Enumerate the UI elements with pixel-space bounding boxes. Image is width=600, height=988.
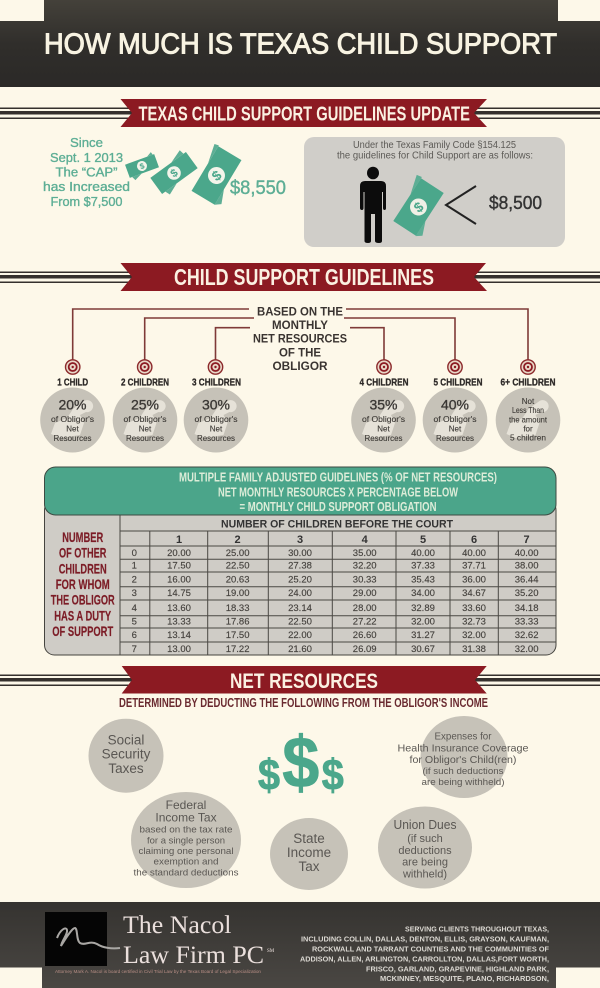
table rows: 21.60 (288, 644, 312, 655)
table rows: 23.14 (288, 603, 312, 614)
table rows: 13.14 (167, 630, 191, 641)
circle: 6+ children: for (523, 425, 533, 434)
row axis label: FOR WHOM (56, 576, 110, 592)
text: based on the monthly net resources (253, 304, 347, 373)
table rows: 4 (132, 603, 137, 614)
service area text: ROCKWALL AND TARRANT COUNTIES AND THE COMMUNITIES OF (312, 944, 549, 954)
table rows: 32.73 (462, 616, 486, 627)
icon: money bill (388, 174, 449, 239)
row axis label: CHILDREN (59, 560, 107, 576)
table rows: 0 (132, 548, 137, 559)
table rows: 2 (132, 575, 137, 586)
table rows: 33.33 (515, 616, 538, 627)
child count labels: 4 CHILDREN (360, 378, 408, 388)
circle: 6+ children (496, 388, 560, 452)
amount: $8,500: $8,500 (489, 192, 542, 213)
circle: 3 children 30% (184, 388, 248, 452)
icon: less-than sign (446, 186, 476, 224)
table green header: = MONTHLY CHILD SUPPORT OBLIGATION (240, 499, 436, 514)
table rows: 34.00 (411, 588, 435, 599)
circle: 1 child 20%: Resources (54, 434, 92, 443)
ribbon heading: net resources: NET RESOURCES (230, 670, 378, 693)
column headers: 5 (420, 534, 426, 546)
table rows: 6 (132, 630, 137, 641)
table: multiple family adjusted guidelines (44, 467, 556, 655)
table rows: 19.00 (226, 588, 249, 599)
ribbon heading: guidelines update (0, 99, 600, 127)
text: based on the monthly net resources: NET RESOURCES (253, 332, 347, 346)
icon: dollar signs: $ (258, 751, 280, 800)
header band (0, 0, 600, 87)
text: family code: the guidelines for Child Support are as follows: (337, 150, 533, 162)
column headers: 2 (235, 534, 241, 546)
circle: union dues: (if such (407, 833, 443, 845)
connector lines (73, 309, 528, 360)
firm name (123, 912, 275, 969)
table grid (120, 515, 556, 655)
text: family code (337, 140, 533, 162)
circle: 1 child 20%: 20% (58, 396, 87, 412)
table rows: 20.00 (167, 548, 191, 559)
text: based on the monthly net resources: MONTHLY (272, 318, 328, 332)
circle: 3 children 30%: Resources (197, 434, 235, 443)
panel: family code comparison (304, 137, 565, 247)
amount: $8,550: $8,550 (230, 178, 286, 199)
text: cap increase: The “CAP” (56, 164, 118, 180)
icon: large money bill: $ (208, 167, 225, 184)
child count labels: 2 CHILDREN (121, 378, 169, 388)
text: cap increase (43, 135, 130, 209)
table rows: 32.00 (462, 630, 486, 641)
icon: medium money bill (147, 148, 201, 198)
table rows: 22.50 (226, 561, 249, 572)
table rows: 40.00 (462, 548, 486, 559)
circle: state income tax: Tax (298, 859, 320, 874)
table rows: 36.00 (462, 575, 486, 586)
column axis label: NUMBER OF CHILDREN BEFORE THE COURT (221, 519, 453, 531)
circle: union dues: are being (402, 857, 448, 869)
service area text: SERVING CLIENTS THROUGHOUT TEXAS, (405, 924, 549, 934)
circle: union dues (378, 806, 472, 888)
circle: 5 children 40% (423, 388, 487, 452)
column headers: 4 (362, 534, 369, 546)
row axis label: THE OBLIGOR (51, 592, 115, 608)
table rows: 26.09 (353, 644, 377, 655)
ribbon heading: child support guidelines: CHILD SUPPORT GUIDELINES (174, 264, 434, 290)
table rows: 32.89 (411, 603, 435, 614)
footer band (0, 902, 600, 988)
table rows: 29.00 (353, 588, 377, 599)
circle: federal income tax: claiming one personal (138, 846, 234, 857)
child count labels: 1 CHILD (57, 378, 88, 388)
circle: 4 children 35%: Net (377, 424, 390, 434)
table rows: 18.33 (226, 603, 249, 614)
child count labels: 5 CHILDREN (434, 378, 482, 388)
table rows: 35.00 (353, 548, 377, 559)
table rows: 32.00 (411, 616, 435, 627)
text: cap increase: Sept. 1 2013 (50, 150, 123, 165)
ribbon heading: net resources (0, 666, 600, 694)
service area text (300, 924, 549, 983)
table rows: 31.27 (411, 630, 435, 641)
circle: state income tax (270, 818, 348, 890)
child count labels: 3 CHILDREN (192, 378, 241, 388)
table rows: 37.33 (411, 561, 435, 572)
table rows: 25.20 (288, 575, 312, 586)
firm name: Law Firm PC (123, 942, 264, 969)
circle: federal income tax: the standard deductions (134, 867, 239, 878)
circle: union dues: Union Dues (394, 818, 456, 832)
circle: union dues: withheld) (402, 868, 447, 880)
circle: 6+ children: Not (522, 397, 535, 406)
table rows: 35.20 (515, 588, 538, 599)
circle: federal income tax (131, 792, 241, 888)
table rows: 30.33 (353, 575, 377, 586)
table rows: 37.71 (462, 561, 486, 572)
circle: federal income tax: Federal (166, 798, 206, 812)
circle: social security taxes: Security (102, 746, 151, 762)
table rows: 27.22 (353, 616, 377, 627)
circle: 4 children 35%: Resources (364, 434, 402, 443)
table green header: MULTIPLE FAMILY ADJUSTED GUIDELINES (% OF NET RESOURCES) (179, 470, 497, 485)
table rows: 14.75 (167, 588, 191, 599)
table rows: 13.60 (167, 603, 191, 614)
column headers: 7 (524, 534, 530, 546)
table rows: 34.18 (515, 603, 538, 614)
table rows: 1 (132, 561, 137, 572)
icon: person (360, 167, 386, 243)
circle: social security taxes: Taxes (108, 761, 144, 776)
service area text: MCKINNEY, MESQUITE, PLANO, RICHARDSON, (380, 974, 549, 983)
icon: targets (66, 360, 535, 374)
table rows: 7 (132, 644, 137, 655)
circle: 5 children 40%: 40% (441, 396, 469, 412)
table rows: 35.43 (411, 575, 435, 586)
row axis label: NUMBER (62, 529, 103, 545)
circle: state income tax: State (293, 831, 325, 846)
table rows: 32.62 (515, 630, 538, 641)
table rows: 27.38 (288, 561, 312, 572)
circle: federal income tax: based on the tax rate (140, 825, 232, 836)
circle: 2 children 25%: 25% (131, 396, 159, 412)
text: based on the monthly net resources: OF THE (279, 346, 321, 360)
table rows: 20.63 (226, 575, 249, 586)
circle: federal income tax: for a single person (147, 836, 225, 846)
table rows: 17.86 (226, 616, 249, 627)
circle: state income tax: Income (287, 845, 331, 860)
icon: small money bill: $ (138, 161, 146, 171)
table green header: NET MONTHLY RESOURCES X PERCENTAGE BELOW (218, 485, 459, 500)
text: cap increase: Since (70, 135, 103, 150)
table rows: 30.67 (411, 644, 435, 655)
row axis label (51, 529, 115, 639)
circle: 1 child 20% (40, 388, 105, 452)
circle: 4 children 35%: 35% (369, 396, 398, 412)
circle: federal income tax: Income Tax (155, 811, 217, 825)
circle: social security taxes (88, 719, 164, 793)
icon: large money bill (188, 143, 247, 208)
table rows: 22.00 (288, 630, 312, 641)
circle: 1 child 20%: Net (66, 424, 80, 434)
circle: 3 children 30%: of Obligor's (194, 415, 238, 424)
table rows: 40.00 (515, 548, 538, 559)
circle: 5 children 40%: of Obligor's (434, 415, 476, 424)
circle: 5 children 40%: Net (449, 424, 462, 434)
icon: dollar signs: $ (322, 751, 344, 800)
table rows: 25.00 (226, 548, 249, 559)
table rows: 32.00 (515, 644, 538, 655)
icon: small money bill (124, 151, 160, 182)
icon: dollar signs: $ (282, 723, 319, 803)
icon: dollar signs (258, 723, 344, 803)
firm name: SM (267, 949, 275, 954)
column headers: 6 (471, 534, 477, 546)
table green header (44, 467, 556, 515)
column headers: 1 (176, 534, 182, 546)
table rows: 40.00 (411, 548, 435, 559)
circle: health insurance expenses: for Obligor's Child(ren) (410, 754, 516, 766)
table rows: 24.00 (288, 588, 312, 599)
icon: money bill: $ (411, 198, 427, 216)
table rows: 36.44 (515, 575, 538, 586)
column headers (176, 534, 530, 546)
table rows: 28.00 (353, 603, 377, 614)
circle: 2 children 25%: Resources (126, 434, 164, 443)
service area text: FRISCO, GARLAND, GRAPEVINE, HIGHLAND PARK, (366, 964, 549, 974)
circle: health insurance expenses: Expenses for (434, 730, 492, 742)
title: HOW MUCH IS TEXAS CHILD SUPPORT (44, 28, 557, 60)
service area text: INCLUDING COLLIN, DALLAS, DENTON, ELLIS, GRAYSON, KAUFMAN, (301, 934, 549, 944)
table rows: 34.67 (462, 588, 486, 599)
circle: 1 child 20%: of Obligor's (51, 415, 94, 424)
table rows: 32.20 (353, 561, 377, 572)
text: cap increase: has Increased (43, 179, 130, 194)
table rows: 22.50 (288, 616, 312, 627)
circle: health insurance expenses: (if such deductions (422, 766, 504, 777)
table rows: 30.00 (288, 548, 312, 559)
subheading: DETERMINED BY DEDUCTING THE FOLLOWING FROM THE OBLIGOR'S INCOME (119, 696, 488, 710)
child count labels (57, 378, 555, 388)
attorney note: Attorney Mark A. Nacol is board certified in Civil Trial Law by the Texas Board of Legal Specialization (55, 969, 262, 974)
circle: 6+ children: Less Than (512, 406, 544, 415)
circle: union dues: deductions (398, 845, 452, 857)
service area text: ADDISON, ALLEN, ARLINGTON, CARROLLTON, DALLAS,FORT WORTH, (300, 954, 549, 964)
table rows: 17.50 (167, 561, 191, 572)
row axis label: OF SUPPORT (52, 623, 113, 639)
icon: medium money bill: $ (168, 167, 180, 180)
table rows: 5 (132, 616, 137, 627)
circle: 2 children 25% (113, 388, 177, 452)
child count labels: 6+ CHILDREN (500, 378, 556, 388)
circle: 5 children 40%: Resources (436, 434, 474, 443)
table rows: 16.00 (167, 575, 191, 586)
circle: 4 children 35% (351, 388, 416, 452)
circle: social security taxes: Social (108, 732, 144, 748)
circle: health insurance expenses: Health Insurance Coverage (398, 743, 529, 755)
circle: 2 children 25%: of Obligor's (124, 415, 166, 424)
table rows: 26.60 (353, 630, 377, 641)
logo mark (45, 912, 120, 966)
table rows: 31.38 (462, 644, 486, 655)
circle: 2 children 25%: Net (139, 424, 152, 434)
circle: 3 children 30%: Net (210, 424, 223, 434)
table rows: 38.00 (515, 561, 538, 572)
table rows: 13.33 (167, 616, 191, 627)
circle: 4 children 35%: of Obligor's (362, 415, 405, 424)
text: family code: Under the Texas Family Code §154.125 (353, 140, 516, 151)
circle: 3 children 30%: 30% (202, 396, 230, 412)
circle: 6+ children: 5 children (510, 434, 546, 442)
table rows: 3 (132, 588, 137, 599)
text: based on the monthly net resources: OBLIGOR (272, 359, 328, 373)
table rows: 33.60 (462, 603, 486, 614)
column headers: 3 (297, 534, 303, 546)
text: based on the monthly net resources: BASED ON THE (257, 304, 343, 318)
table rows: 17.22 (226, 644, 249, 655)
circle: federal income tax: exemption and (154, 857, 218, 868)
row axis label: HAS A DUTY (54, 607, 112, 623)
firm name: The Nacol (123, 912, 232, 939)
table rows (132, 548, 538, 655)
row axis label: OF OTHER (59, 545, 106, 561)
ribbon heading: child support guidelines (0, 263, 600, 291)
table rows: 13.00 (167, 644, 191, 655)
circle: health insurance expenses: are being withheld) (422, 777, 504, 788)
table rows: 17.50 (226, 630, 249, 641)
circle: health insurance expenses (398, 716, 529, 798)
ribbon heading: guidelines update: TEXAS CHILD SUPPORT GUIDELINES UPDATE (138, 104, 470, 126)
text: cap increase: From $7,500 (50, 194, 122, 209)
circle: 6+ children: the amount (509, 416, 548, 425)
